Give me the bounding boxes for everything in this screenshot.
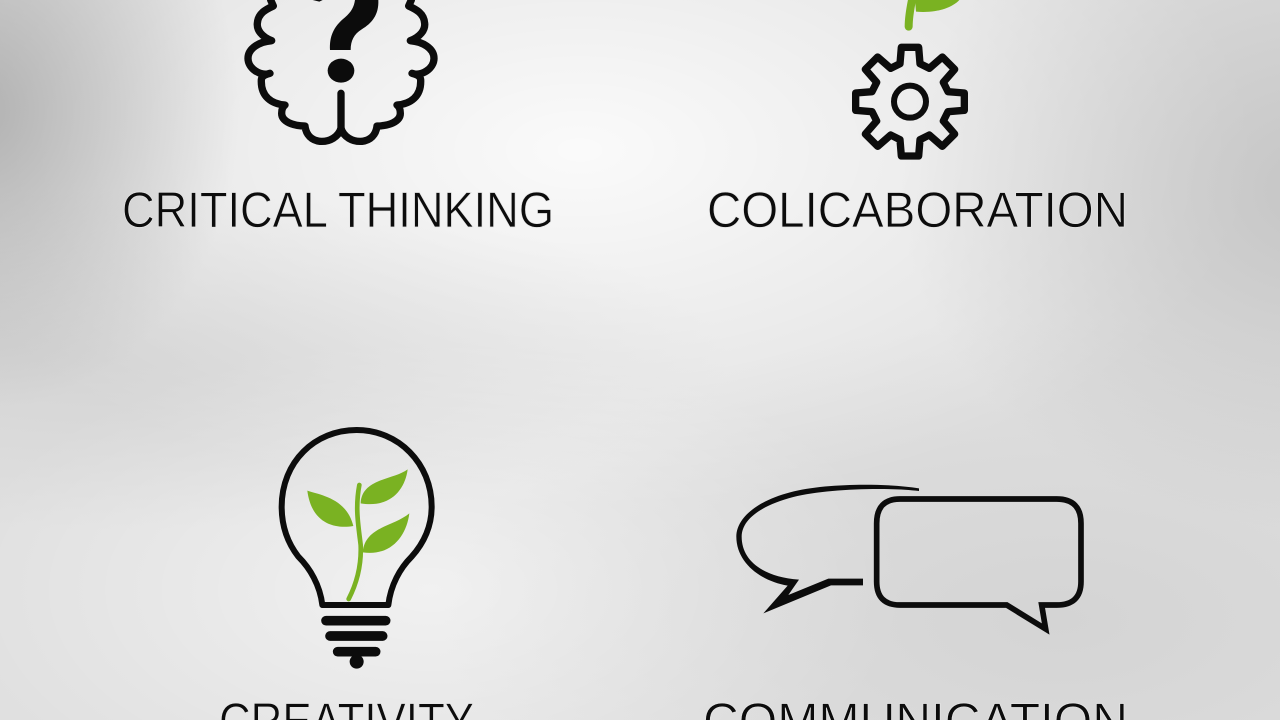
heading: critical thinking: CRITICAL THINKING [122, 182, 554, 238]
icon: seedling stem and gear [856, 0, 964, 156]
icon: two speech bubbles [736, 485, 1081, 629]
heading: colicaboration: COLICABORATION [707, 182, 1128, 238]
icon: brain with question mark [248, 0, 434, 141]
icon: light bulb with plant [282, 430, 432, 669]
